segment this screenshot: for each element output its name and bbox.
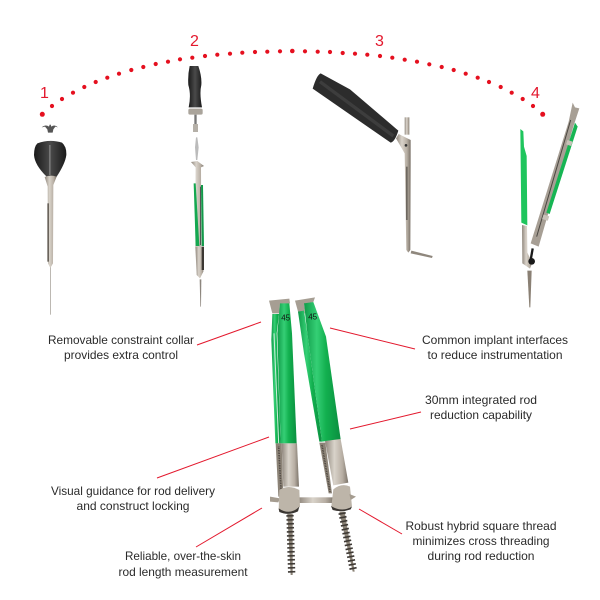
callout text: visual guidance: and construct locking bbox=[76, 499, 190, 513]
callout text: rod reduction: reduction capability bbox=[430, 408, 532, 422]
instrument 4: open reducer with screw bbox=[520, 103, 579, 307]
callout text: interfaces: to reduce instrumentation bbox=[428, 348, 562, 362]
left pedicle screw bbox=[287, 514, 293, 575]
callout text: measurement: Reliable, over-the-skin bbox=[125, 549, 241, 563]
left tower bbox=[269, 299, 299, 497]
right screw head bbox=[331, 485, 356, 511]
left screw head bbox=[270, 487, 300, 514]
callout text: visual guidance: Visual guidance for rod delivery bbox=[51, 484, 215, 498]
size label right: 45 bbox=[308, 313, 318, 322]
callout text: rod reduction bbox=[425, 393, 537, 422]
callout text: thread bbox=[406, 519, 556, 563]
dotted arc bbox=[40, 49, 545, 117]
callout line: visual guidance bbox=[157, 437, 269, 478]
step number 4: 4 bbox=[531, 85, 540, 102]
right tower bbox=[295, 297, 348, 493]
callout line: collar bbox=[197, 322, 261, 345]
callout text: measurement bbox=[118, 549, 248, 579]
callout text: thread: Robust hybrid square thread bbox=[406, 519, 556, 533]
step number 3: 3 bbox=[375, 33, 384, 50]
instrument 1: dark handle driver bbox=[34, 125, 66, 315]
callout text: visual guidance bbox=[51, 484, 215, 513]
right pedicle screw bbox=[339, 512, 355, 572]
step number 2: 2 bbox=[190, 33, 199, 50]
callout text: thread: minimizes cross threading bbox=[412, 534, 550, 548]
rod connecting the screws bbox=[298, 497, 334, 503]
callout text: interfaces: Common implant interfaces bbox=[422, 333, 568, 347]
callout text: collar: Removable constraint collar bbox=[48, 333, 194, 347]
callout text: collar bbox=[48, 333, 194, 362]
callout line: rod reduction bbox=[350, 412, 421, 429]
callout text: rod reduction: 30mm integrated rod bbox=[425, 393, 537, 407]
callout text: interfaces bbox=[422, 333, 568, 362]
step number 1: 1 bbox=[40, 85, 49, 102]
instrument 3: angled handle tool bbox=[313, 73, 433, 258]
size label left: 45 bbox=[281, 313, 291, 322]
callout line: thread bbox=[359, 509, 402, 534]
callout line: measurement bbox=[196, 508, 262, 547]
instrument 2: driver with green tube bbox=[188, 66, 204, 307]
central assembled device bbox=[269, 297, 356, 575]
callout text: collar: provides extra control bbox=[64, 348, 178, 362]
callout text: measurement: rod length measurement bbox=[118, 565, 248, 579]
callout line: interfaces bbox=[330, 328, 415, 349]
callout text: thread: during rod reduction bbox=[428, 549, 534, 563]
